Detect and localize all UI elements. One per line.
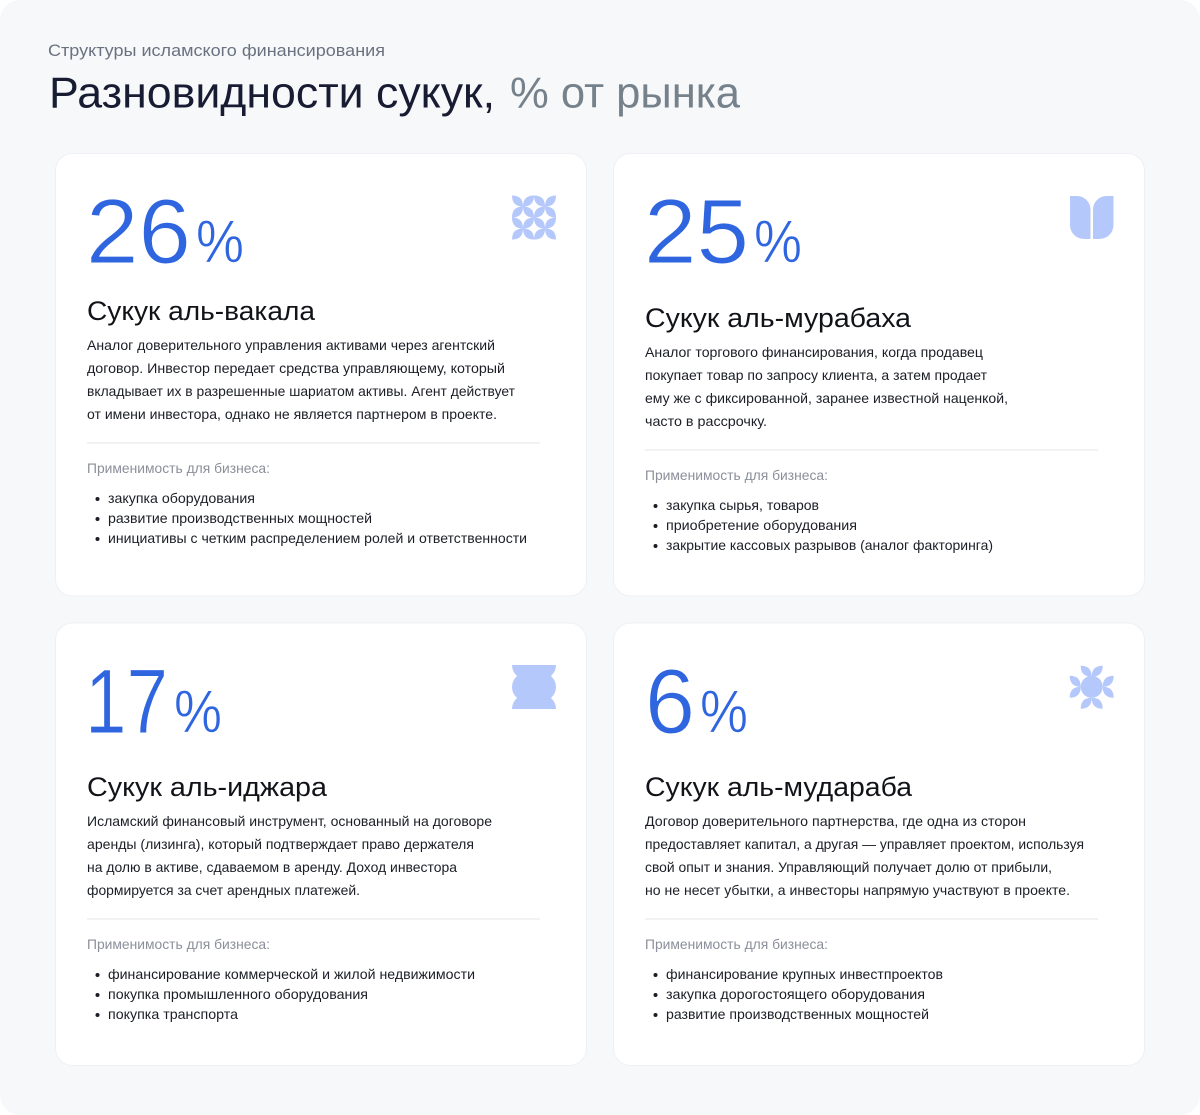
description: предоставляет капитал, а другая — управляет проектом, используя bbox=[645, 836, 1084, 852]
stat: 26%: % bbox=[196, 208, 244, 275]
description bbox=[87, 813, 492, 898]
icon: stacked discs bbox=[512, 665, 556, 709]
heading: Сукук аль-вакала bbox=[87, 296, 315, 326]
bullet list: покупка транспорта bbox=[108, 1006, 238, 1022]
description: Аналог доверительного управления активами через агентский bbox=[87, 337, 495, 353]
bullet list: закрытие кассовых разрывов (аналог факторинга) bbox=[666, 537, 993, 553]
bullet list: покупка промышленного оборудования bbox=[108, 986, 368, 1002]
description: но не несет убытки, а инвесторы напрямую участвуют в проекте. bbox=[645, 882, 1070, 898]
description bbox=[645, 344, 1008, 429]
subtitle: Структуры исламского финансирования bbox=[48, 42, 385, 60]
description: на долю в активе, сдаваемом в аренду. Доход инвестора bbox=[87, 859, 457, 875]
label: applicability: Применимость для бизнеса: bbox=[87, 936, 270, 952]
panel: Сукук аль-вакала bbox=[56, 154, 586, 596]
bullet list: финансирование крупных инвестпроектов bbox=[666, 966, 943, 982]
bullet list: закупка сырья, товаров bbox=[666, 497, 819, 513]
description: от имени инвестора, однако не является партнером в проекте. bbox=[87, 406, 497, 422]
heading: Сукук аль-мурабаха bbox=[645, 303, 911, 333]
stat: 26%: 26 bbox=[86, 181, 191, 283]
description bbox=[87, 337, 516, 422]
description: свой опыт и знания. Управляющий получает долю от прибыли, bbox=[645, 859, 1052, 875]
heading: Сукук аль-иджара bbox=[87, 772, 327, 802]
stat: 6% bbox=[645, 651, 748, 753]
bullet list: инициативы с четким распределением ролей и ответственности bbox=[108, 530, 527, 546]
stat: 25%: % bbox=[754, 208, 802, 275]
label: applicability: Применимость для бизнеса: bbox=[645, 936, 828, 952]
bullet list bbox=[96, 490, 527, 546]
icon: sun flower bbox=[1070, 666, 1114, 709]
description: ему же с фиксированной, заранее известной наценкой, bbox=[645, 390, 1008, 406]
panel: Сукук аль-иджара bbox=[56, 623, 586, 1066]
label: applicability: Применимость для бизнеса: bbox=[645, 467, 828, 483]
description: Аналог торгового финансирования, когда продавец bbox=[645, 344, 983, 360]
stat: 25%: 25 bbox=[644, 181, 749, 283]
bullet list bbox=[96, 966, 475, 1022]
description: договор. Инвестор передает средства управляющему, который bbox=[87, 360, 505, 376]
bullet list: развитие производственных мощностей bbox=[108, 510, 372, 526]
description: аренды (лизинга), который подтверждает право держателя bbox=[87, 836, 474, 852]
stat: 25% bbox=[644, 181, 802, 283]
bullet list bbox=[654, 497, 993, 553]
bullet list: приобретение оборудования bbox=[666, 517, 857, 533]
icon: two leaves bbox=[1070, 196, 1114, 239]
description: покупает товар по запросу клиента, а затем продает bbox=[645, 367, 988, 383]
label: applicability: Применимость для бизнеса: bbox=[87, 460, 270, 476]
panel: Сукук аль-мурабаха bbox=[614, 154, 1144, 596]
description: часто в рассрочку. bbox=[645, 413, 767, 429]
icon: petal lattice bbox=[512, 196, 556, 240]
stat: 6%: 6 bbox=[645, 651, 695, 753]
stat: 26% bbox=[86, 181, 244, 283]
stat: 6%: % bbox=[700, 678, 748, 745]
bullet list: финансирование коммерческой и жилой недвижимости bbox=[108, 966, 475, 982]
title: % от рынка bbox=[510, 68, 741, 118]
bullet list bbox=[654, 966, 943, 1022]
title: Разновидности сукук, bbox=[49, 68, 495, 118]
description: Исламский финансовый инструмент, основанный на договоре bbox=[87, 813, 492, 829]
panel: Сукук аль-мудараба bbox=[614, 623, 1144, 1066]
description: вкладывает их в разрешенные шариатом активы. Агент действует bbox=[87, 383, 516, 399]
title bbox=[49, 68, 741, 118]
description: формируется за счет арендных платежей. bbox=[87, 882, 360, 898]
description: Договор доверительного партнерства, где одна из сторон bbox=[645, 813, 1026, 829]
bullet list: закупка дорогостоящего оборудования bbox=[666, 986, 925, 1002]
stat: 17%: 17 bbox=[85, 651, 168, 753]
heading: Сукук аль-мудараба bbox=[645, 772, 912, 802]
stat: 17%: % bbox=[174, 678, 222, 745]
description bbox=[645, 813, 1084, 898]
bullet list: закупка оборудования bbox=[108, 490, 255, 506]
bullet list: развитие производственных мощностей bbox=[666, 1006, 929, 1022]
